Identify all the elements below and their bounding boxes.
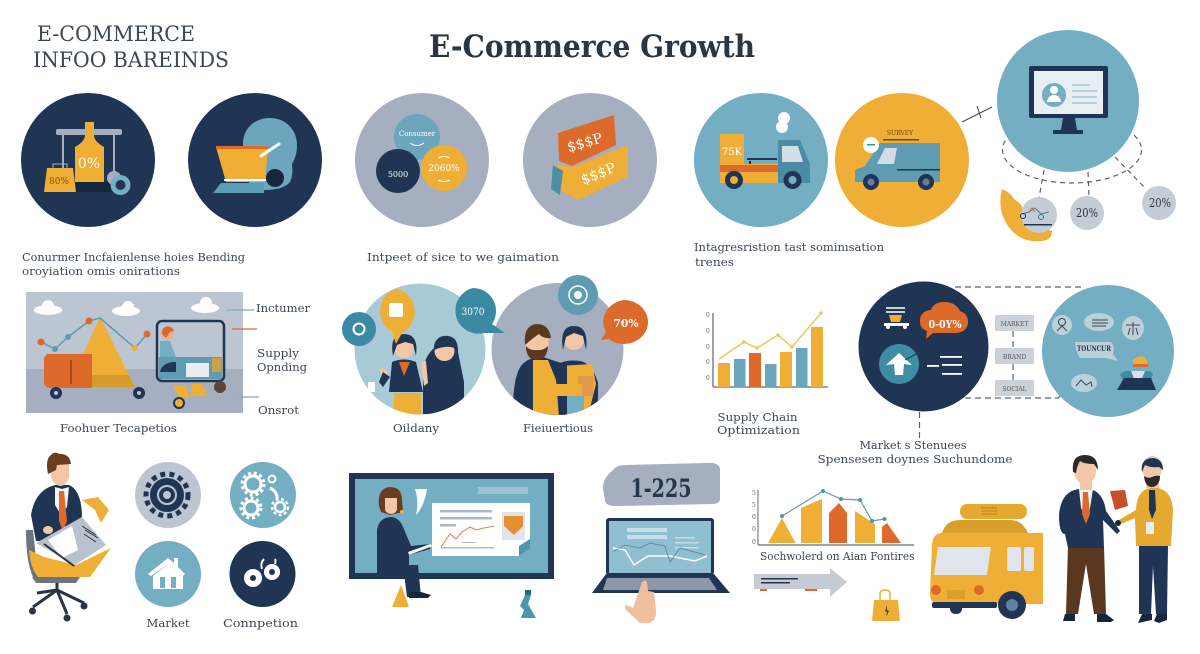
stat: 20 percent <box>1070 196 1104 230</box>
connector: van to monitor <box>962 106 992 122</box>
icon: monitor circle <box>997 30 1139 172</box>
trend line <box>38 318 150 352</box>
title: E-Commerce Growth <box>429 29 755 65</box>
panel: teal network circle <box>1042 285 1174 417</box>
illustration: yellow delivery van <box>930 504 1043 619</box>
people <box>368 334 464 417</box>
chart: sales area chart: 0 <box>752 514 756 521</box>
chart: sales area chart: 0 <box>752 526 756 533</box>
chart: supply chain bars: 0 <box>706 359 710 366</box>
labels: gray boxes <box>995 315 1034 396</box>
bubble: refresh icon <box>342 312 376 346</box>
text: integration caption: trenes <box>695 255 734 269</box>
icon: house <box>135 541 201 607</box>
text: market strategies caption <box>818 438 1013 466</box>
text: integration caption <box>694 240 885 269</box>
text: chart caption: Sochwolerd on Aian Fontires <box>760 549 915 563</box>
panel: presentation screen <box>352 476 551 598</box>
labels: gray boxes: BRAND <box>1003 354 1026 361</box>
text: supply chain caption: Optimization <box>717 423 801 437</box>
text: impact caption: Intpeet of sice to we gaimation <box>367 250 560 264</box>
icon: stacked boxes circle: $$$P <box>579 160 618 188</box>
text: supply opnding label <box>257 346 308 374</box>
icon: truck circle: 75K <box>722 147 743 158</box>
text: consumer caption: oroyiation omis onirations <box>22 264 180 278</box>
icon: shopping bag <box>872 590 900 621</box>
seated presenter <box>377 487 433 598</box>
text: integration caption: Intagresristion tast sominısation <box>694 240 885 254</box>
callout lines for scene <box>227 310 259 397</box>
red card <box>1110 490 1128 510</box>
bubble: percent teal <box>455 288 505 334</box>
icon: three metric bubbles circle <box>355 93 489 227</box>
icon: scale and bottle circle <box>21 93 155 227</box>
chart: supply chain bars <box>706 311 828 387</box>
subtitle block: E-COMMERCE <box>37 22 195 46</box>
dashed links: market strategy <box>920 287 1083 438</box>
bubble: 70 percent: 70% <box>614 317 639 330</box>
chart: supply chain bars: 0 <box>706 375 710 382</box>
bubble: percent teal: 3070 <box>462 307 484 318</box>
icon: teal figure <box>520 590 536 618</box>
text: onsrot label: Onsrot <box>258 403 299 417</box>
illustration: businessman on chair <box>26 453 111 622</box>
text: people captions: Fieiuertious <box>523 421 593 435</box>
panel: couple with tablet <box>492 283 624 419</box>
left man <box>1059 455 1120 622</box>
cart icon <box>884 307 909 329</box>
subtitle block: INFOO BAREINDS <box>33 48 229 72</box>
terminal with operator <box>157 321 226 408</box>
panel: teal network circle: TOUNCUR <box>1077 344 1112 353</box>
dashed connectors to percentages <box>1039 157 1145 198</box>
chair legs <box>33 582 84 614</box>
icon: three metric bubbles circle: 2060% <box>428 164 460 174</box>
illustration: laptop with chart <box>592 518 730 623</box>
text: people captions: Oildany <box>393 421 440 435</box>
bubble: orange percent: 0-0Y% <box>928 318 962 331</box>
icon: three metric bubbles circle: 5000 <box>388 170 408 179</box>
text: supply opnding label: Supply <box>257 346 300 360</box>
text: supply opnding label: Opnding <box>257 360 308 374</box>
pyramid <box>83 317 135 387</box>
clouds <box>34 297 219 316</box>
subtitle block <box>33 22 229 72</box>
right man <box>1119 456 1173 623</box>
icon: gears <box>230 462 296 528</box>
text: supply chain caption <box>717 410 801 437</box>
stat: 20 percent right: 20% <box>1149 196 1171 210</box>
orange cart <box>44 354 145 399</box>
arrow <box>754 568 847 597</box>
chart: supply chain bars: 0 <box>706 344 710 351</box>
illustration: two businessmen <box>1059 455 1173 623</box>
icon: three metric bubbles circle: Consumer <box>399 130 436 138</box>
text: competition label: Connpetion <box>223 616 299 630</box>
text: supply chain caption: Supply Chain <box>718 410 798 424</box>
bubble: badge <box>558 275 598 315</box>
chart: supply chain bars: 0 <box>706 328 710 335</box>
text: scene caption: Foohuer Tecapetios <box>60 421 177 435</box>
dashed ring around monitor <box>1002 117 1142 183</box>
text: market strategies caption: Market s Stenuees <box>860 438 967 452</box>
text: consumer caption <box>22 250 246 278</box>
icon: scale and bottle circle: 80% <box>49 177 69 187</box>
chart: supply chain bars: 0 <box>706 312 710 319</box>
funnel <box>1117 356 1156 390</box>
panel: market navy circle <box>858 282 988 412</box>
icon: amber blob and mini chart <box>1000 189 1057 241</box>
badge: 1-225 <box>603 463 720 506</box>
chart: sales area chart <box>752 489 914 546</box>
text: inctumer label: Inctumer <box>256 301 310 315</box>
arrow badge <box>879 344 919 384</box>
icon: van circle <box>835 93 969 227</box>
icon: gear target <box>135 462 201 528</box>
panel: couple with speech bubbles <box>354 284 486 417</box>
badge: 1-225: 1-225 <box>630 474 692 503</box>
speech mark <box>415 489 427 515</box>
chart: sales area chart: 5 <box>752 502 756 509</box>
text: consumer caption: Conurmer Incfaienlense hoies Bending <box>22 250 246 264</box>
icon: shopping cart circle <box>188 93 322 227</box>
icon: amber cone <box>392 585 409 607</box>
bubble: amber icon <box>380 289 415 344</box>
labels: gray boxes: MARKET <box>1001 321 1028 328</box>
icon: truck circle <box>694 93 828 227</box>
icon: competition <box>230 541 296 607</box>
bubble: 70 percent <box>601 300 648 344</box>
icon: stacked boxes circle: $$$P <box>565 130 604 156</box>
icon: stacked boxes circle <box>523 93 657 227</box>
icon: scale and bottle circle: 0% <box>78 156 100 172</box>
stat: 20 percent: 20% <box>1076 206 1098 220</box>
icon: van circle: SURVEY <box>887 130 914 137</box>
text: market strategies caption: Spensesen doynes Suchundome <box>818 452 1013 466</box>
panel: logistics scene <box>26 292 243 413</box>
text: people captions <box>393 421 593 435</box>
chart: sales area chart: 0 <box>752 539 756 546</box>
text: market label: Market <box>146 616 190 630</box>
presentation paper <box>432 503 530 556</box>
stat: 20 percent right <box>1142 186 1176 220</box>
chart: sales area chart: 5 <box>752 490 756 497</box>
labels: gray boxes: SOCIAL <box>1002 386 1027 393</box>
